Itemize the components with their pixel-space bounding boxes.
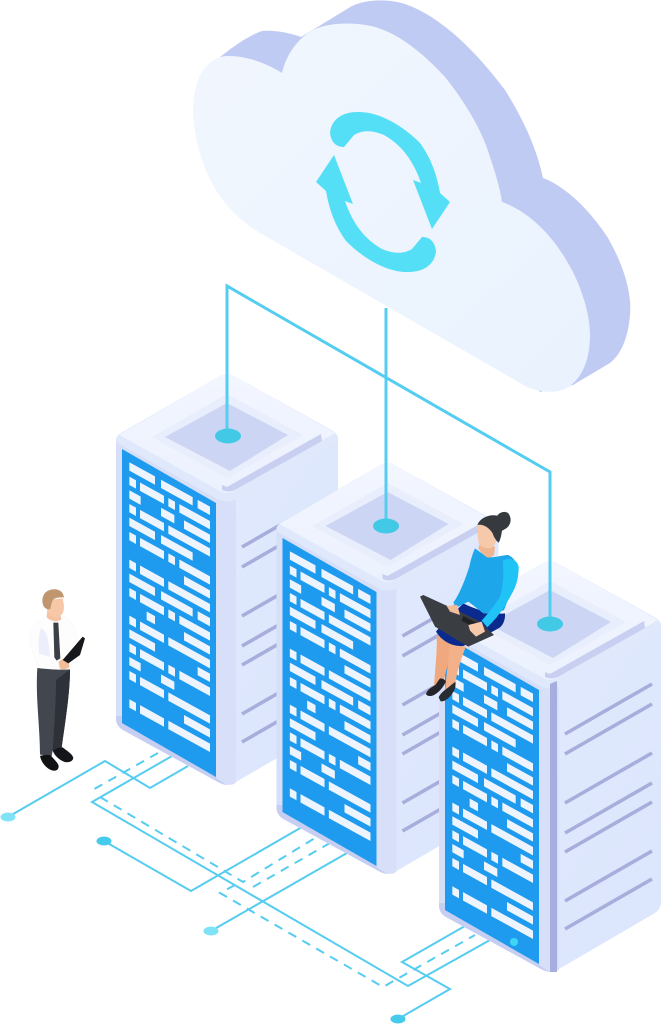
- far leg: [434, 635, 452, 686]
- neck and face: [478, 543, 495, 558]
- node: left server: [215, 428, 241, 444]
- line: long bus to server 3: [92, 756, 490, 986]
- line: server 3 to bottom dot: [398, 926, 465, 1019]
- icon: sync arrows: [316, 112, 450, 272]
- trousers: [37, 668, 70, 756]
- skirt: [436, 603, 505, 646]
- shoes: [426, 678, 446, 696]
- tie: [53, 623, 60, 661]
- server rack: left: [116, 374, 338, 785]
- hair: [477, 512, 511, 543]
- person: woman with laptop: [420, 512, 519, 701]
- sync arrow: bottom: [316, 155, 436, 272]
- floor circuit lines: [8, 753, 490, 1019]
- tablet: [63, 637, 85, 663]
- dot: bottom terminal: [390, 1014, 406, 1024]
- sync arrow: top: [330, 112, 450, 229]
- dashed line: bus to server 3: [220, 885, 475, 987]
- line: left dot to server 1: [8, 761, 188, 817]
- cloud back side: [220, 0, 630, 392]
- line: dot to server 2: [104, 827, 302, 891]
- neck and face: [47, 610, 61, 621]
- cloud front face: [193, 24, 590, 392]
- cloud: [193, 0, 630, 392]
- right arm: [482, 559, 519, 627]
- laptop: [420, 595, 494, 647]
- line: lower dot to server 2: [211, 853, 347, 931]
- status light: [510, 938, 518, 946]
- wire: left and right servers: [227, 286, 550, 624]
- dot: left terminal: [0, 812, 16, 822]
- wire: middle server: [384, 308, 388, 526]
- server rack: middle: [276, 463, 499, 874]
- shoes: [40, 755, 59, 771]
- sweater: [453, 548, 518, 614]
- dashed line: second to server 2: [253, 843, 330, 887]
- server rack: right: [439, 561, 661, 972]
- person: man with tablet: [30, 589, 85, 771]
- dot: upper terminal: [96, 836, 112, 846]
- dashed line: bus to server 2: [100, 797, 315, 882]
- dot: lower terminal: [204, 926, 218, 936]
- shirt: [30, 615, 79, 669]
- node: right server: [537, 616, 563, 632]
- node: middle server: [373, 518, 399, 534]
- hand: [58, 658, 69, 669]
- dashed line: server 1: [89, 753, 158, 792]
- hands: [447, 605, 460, 615]
- connection wires cloud to servers: [227, 286, 550, 624]
- near leg: [445, 643, 466, 693]
- hair: [42, 589, 64, 609]
